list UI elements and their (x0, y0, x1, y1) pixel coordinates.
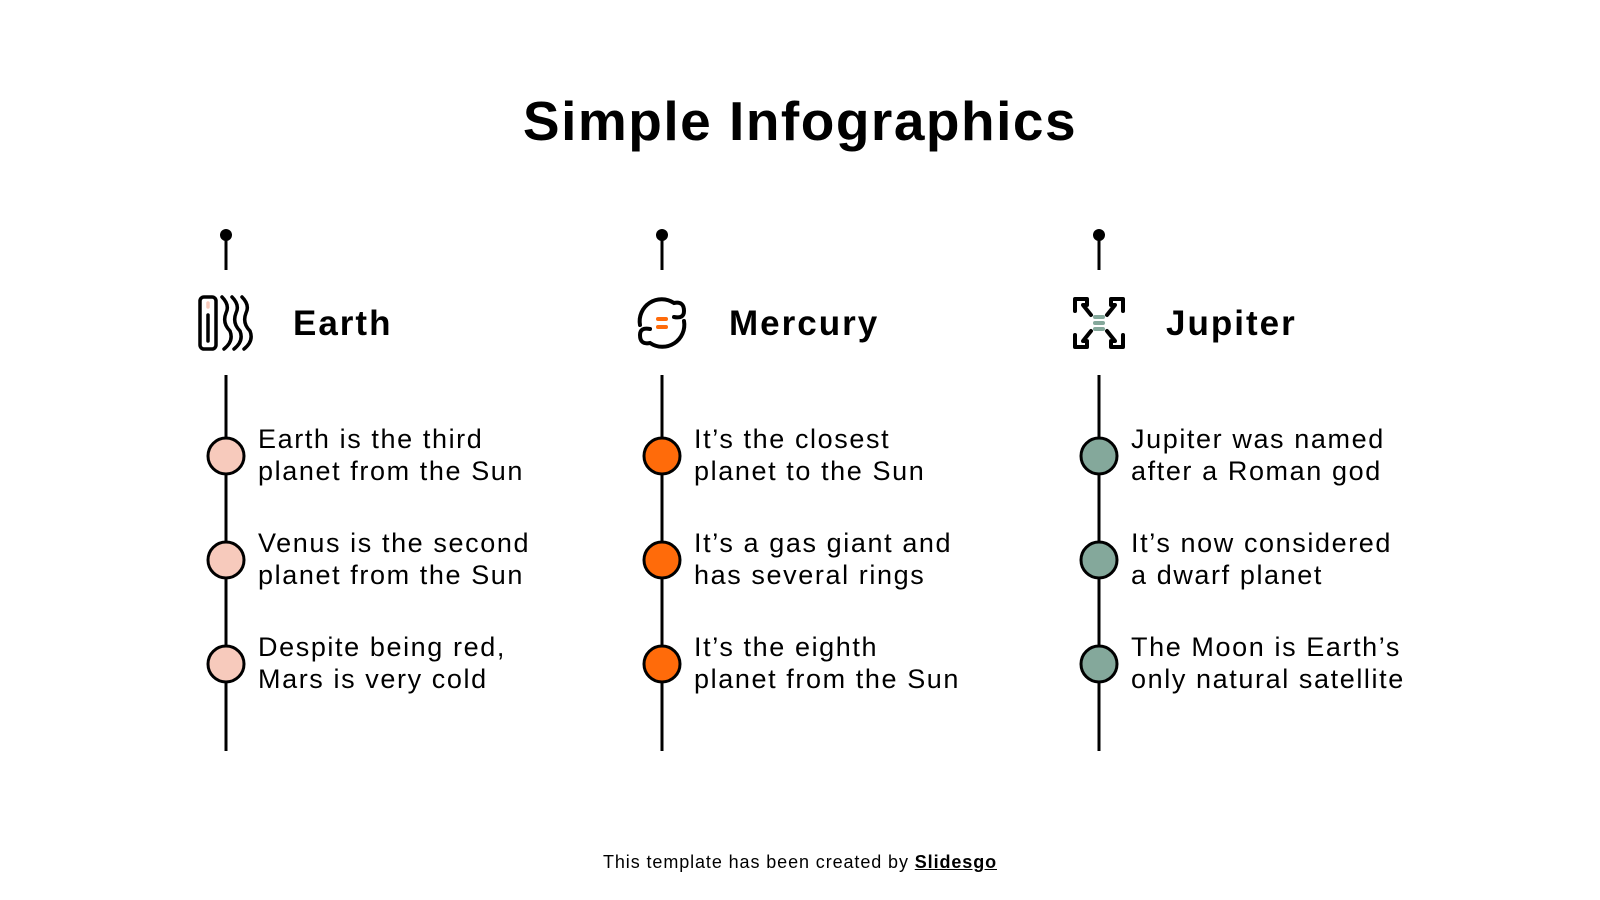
heading: jupiter: Jupiter (1166, 304, 1297, 343)
icon: earth (198, 295, 253, 351)
timeline: mercury (642, 229, 682, 751)
heading: mercury: Mercury (729, 304, 879, 343)
text: mercury 1: It’s the closest (694, 424, 890, 454)
text: mercury 3: planet from the Sun (694, 664, 960, 694)
text: mercury 2 (694, 528, 952, 590)
text: jupiter 2: It’s now considered (1131, 528, 1392, 558)
text: earth 2: planet from the Sun (258, 560, 524, 590)
panel: jupiter (1073, 229, 1405, 751)
text: earth 1: Earth is the third (258, 424, 483, 454)
text: mercury 2: It’s a gas giant and (694, 528, 952, 558)
text: earth 2: Venus is the second (258, 528, 530, 558)
icon: jupiter (1073, 297, 1125, 349)
panel: earth (198, 229, 530, 751)
text: jupiter 1: Jupiter was named (1131, 424, 1385, 454)
text: earth 3 (258, 632, 506, 694)
footer: This template has been created by Slidesgo (603, 852, 997, 872)
heading: earth: Earth (293, 304, 392, 343)
title: Simple Infographics (523, 90, 1077, 152)
text: jupiter 2: a dwarf planet (1131, 560, 1323, 590)
timeline: jupiter (1080, 229, 1118, 751)
text: jupiter 3 (1131, 632, 1405, 694)
text: earth 1: planet from the Sun (258, 456, 524, 486)
text: jupiter 3: The Moon is Earth’s (1131, 632, 1401, 662)
text: earth 1 (258, 424, 524, 486)
icon: mercury (638, 297, 686, 349)
text: mercury 3: It’s the eighth (694, 632, 878, 662)
timeline: earth (206, 229, 246, 751)
text: mercury 1: planet to the Sun (694, 456, 925, 486)
text: jupiter 1: after a Roman god (1131, 456, 1382, 486)
text: mercury 3 (694, 632, 960, 694)
text: earth 3: Despite being red, (258, 632, 506, 662)
text: mercury 2: has several rings (694, 560, 925, 590)
text: earth 3: Mars is very cold (258, 664, 488, 694)
text: jupiter 2 (1131, 528, 1392, 590)
text: jupiter 1 (1131, 424, 1385, 486)
panel: mercury (638, 229, 960, 751)
text: earth 2 (258, 528, 530, 590)
text: mercury 1 (694, 424, 925, 486)
text: jupiter 3: only natural satellite (1131, 664, 1405, 694)
